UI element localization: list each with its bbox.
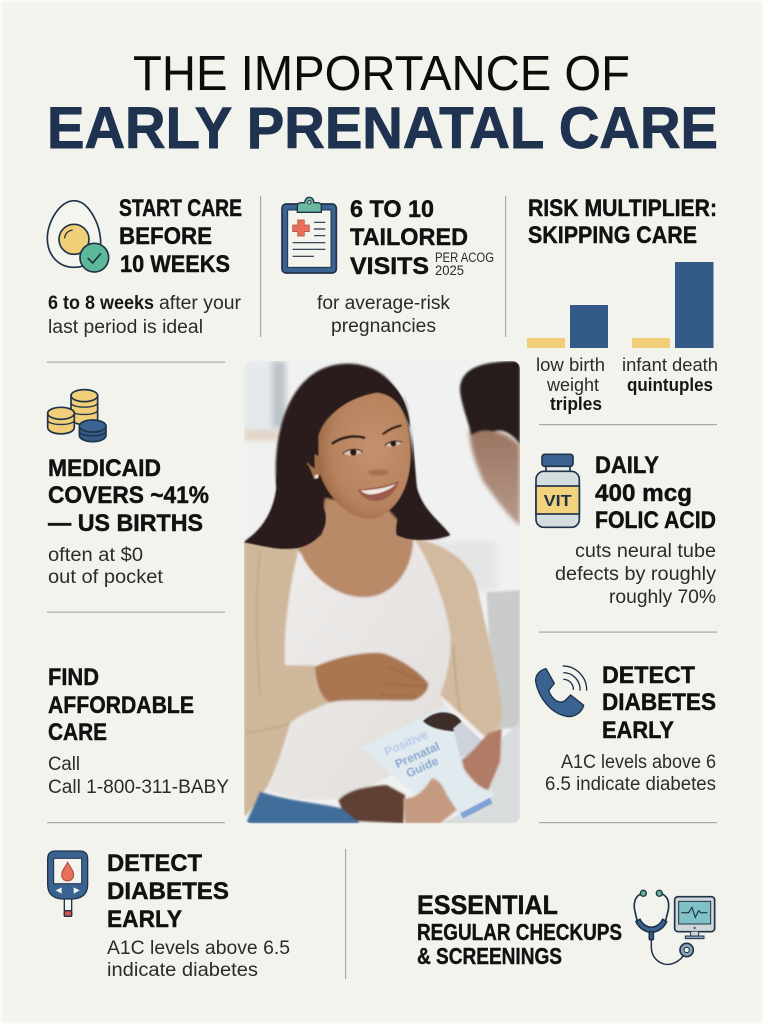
text block: out of pocket (48, 567, 164, 588)
icon: vitamin bottle (536, 454, 579, 527)
heading: TAILORED (350, 224, 468, 251)
panel: medicaid (48, 390, 209, 588)
heading: 10 WEEKS (120, 251, 230, 278)
white top (265, 538, 453, 800)
icon: coins (48, 390, 106, 442)
chart labels (536, 355, 718, 414)
nose (367, 469, 389, 476)
chart labels: weight (546, 375, 599, 395)
hair strand left (244, 461, 326, 549)
text block: 6.5 indicate diabetes (545, 774, 716, 795)
guide book (362, 705, 494, 818)
heading: EARLY (602, 717, 674, 744)
text block (555, 541, 717, 608)
bar chart (527, 262, 714, 348)
panel: phone diabetes (536, 662, 716, 795)
source note: PER ACOG (435, 250, 494, 265)
text block (317, 293, 450, 337)
heading: — US BIRTHS (48, 510, 203, 537)
guide book: Guide (404, 754, 441, 780)
heading: EARLY (107, 906, 182, 933)
jeans (246, 792, 360, 823)
cardigan right (413, 538, 502, 737)
heading: DETECT (107, 850, 202, 877)
heading (107, 850, 229, 933)
text block: indicate diabetes (107, 960, 258, 981)
heading: DETECT (602, 662, 695, 689)
title: THE IMPORTANCE OF (133, 47, 630, 101)
icon: phone (536, 666, 587, 717)
heading: FIND (48, 664, 99, 691)
guide book: Positive (382, 727, 430, 759)
heading: BEFORE (119, 223, 212, 250)
text block: Call 1-800-311-BABY (48, 777, 229, 798)
text block: pregnancies (331, 316, 436, 337)
heading: SKIPPING CARE (528, 222, 697, 249)
panel: essential checkups (417, 890, 715, 969)
text block: A1C levels above 6.5 (107, 938, 290, 959)
heading (350, 196, 468, 280)
heading: DIABETES (107, 878, 229, 905)
text block (48, 754, 229, 798)
photo: expectant mother with doctor (244, 361, 520, 823)
hand on belly (315, 653, 428, 702)
doctor hands (462, 728, 502, 790)
icon: egg with check (47, 201, 109, 272)
cardigan left (244, 541, 330, 815)
heading (528, 195, 717, 249)
text block: often at $0 (48, 545, 143, 566)
heading: RISK MULTIPLIER: (528, 195, 717, 222)
face (318, 392, 411, 519)
chart labels: triples (550, 394, 602, 414)
panel: risk multiplier (527, 195, 718, 414)
text block (48, 293, 242, 338)
heading: VISITS (350, 253, 429, 280)
heading: & SCREENINGS (417, 943, 562, 969)
doctor head (460, 361, 520, 526)
text block: for average-risk (317, 293, 450, 314)
heading: ESSENTIAL (417, 890, 558, 920)
hair strand right (396, 395, 450, 540)
heading (48, 664, 194, 746)
text block: last period is ideal (48, 317, 203, 338)
panel: start care before 10 weeks (47, 195, 242, 338)
text block: after your (159, 293, 242, 314)
text block (545, 752, 716, 795)
chart labels: infant death (622, 355, 718, 375)
source note: 2025 (435, 263, 464, 278)
chart labels: low birth (536, 355, 605, 375)
heading (595, 452, 716, 534)
heading: DIABETES (602, 689, 716, 716)
hair front over forehead (306, 377, 411, 468)
heading: MEDICAID (48, 455, 161, 482)
guide book: Prenatal (393, 739, 442, 771)
icon: stethoscope and monitor (634, 890, 715, 964)
chart labels: quintuples (627, 375, 713, 395)
heading: CARE (48, 719, 107, 746)
panel: detect diabetes bottom (48, 850, 290, 981)
title: EARLY PRENATAL CARE (47, 96, 718, 161)
text block: roughly 70% (609, 587, 716, 608)
panel: find affordable care (48, 664, 229, 798)
heading: DAILY (595, 452, 659, 479)
icon: clipboard (282, 197, 336, 273)
heading: COVERS ~41% (48, 482, 209, 509)
text block: defects by roughly (555, 564, 717, 585)
heading (602, 662, 716, 744)
icon: vitamin bottle: VIT (544, 493, 572, 510)
panel: folic acid (536, 452, 717, 608)
heading: START CARE (119, 195, 242, 222)
source note (435, 250, 494, 278)
heading: REGULAR CHECKUPS (417, 919, 622, 945)
heading: FOLIC ACID (595, 507, 716, 534)
hair back (244, 364, 450, 555)
text block: A1C levels above 6 (561, 752, 716, 773)
neck and chest (298, 498, 413, 597)
panel: tailored visits (282, 196, 494, 337)
heading: 400 mcg (595, 480, 692, 507)
heading (48, 455, 209, 537)
heading: AFFORDABLE (48, 692, 194, 719)
text block (107, 938, 290, 981)
heading: 6 TO 10 (350, 196, 434, 223)
icon: glucose meter (48, 851, 88, 916)
heading (417, 890, 622, 969)
lower hand (338, 785, 405, 823)
mouth (357, 481, 399, 501)
brows (333, 436, 364, 443)
text block: cuts neural tube (575, 541, 716, 562)
text block: 6 to 8 weeks (48, 293, 154, 314)
doctor coat (440, 722, 520, 823)
sofa (487, 590, 520, 728)
title (47, 47, 718, 161)
text block (48, 545, 164, 588)
heading (119, 195, 242, 278)
eyes (343, 450, 362, 455)
text block: Call (48, 754, 80, 775)
